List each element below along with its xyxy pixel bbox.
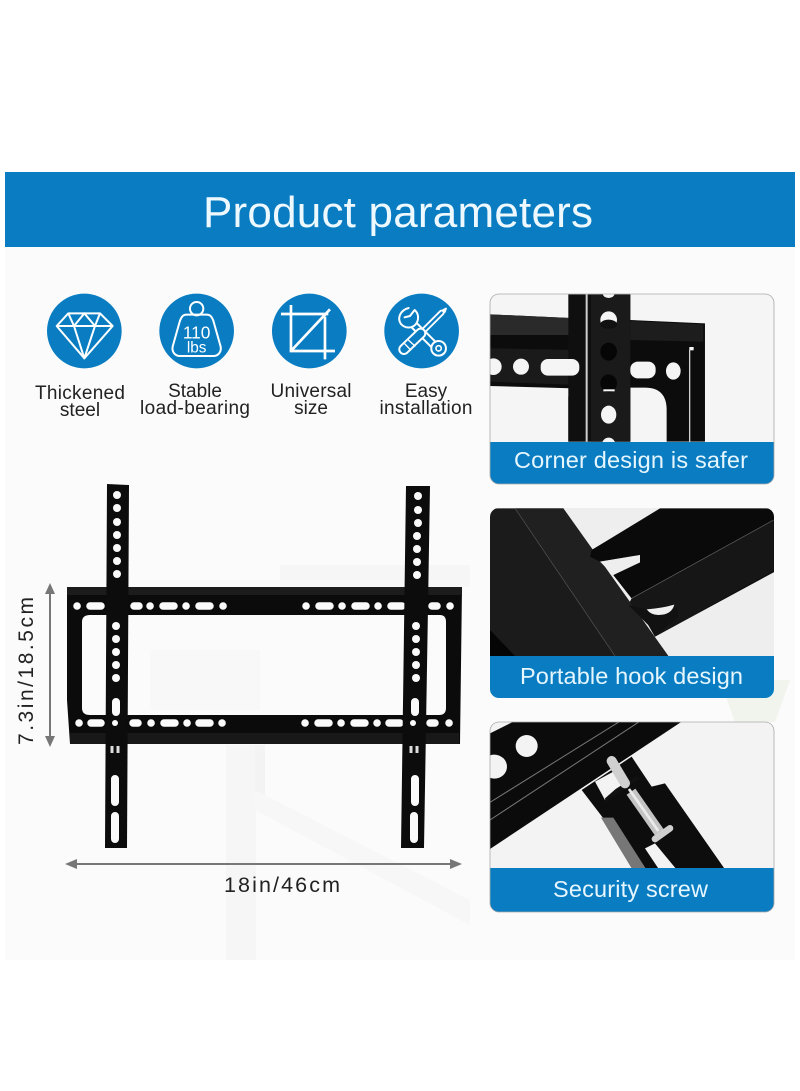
label: easy installation [380, 381, 472, 419]
icon: wrench and screwdriver [384, 294, 459, 368]
wall mount bracket [67, 484, 462, 848]
header banner [5, 172, 795, 247]
panel: hook design [490, 508, 775, 698]
photo: screw close-up [482, 722, 724, 868]
infographic canvas [5, 172, 795, 960]
icon: crop frame [272, 294, 347, 368]
caption: Security screw [553, 876, 709, 902]
caption bar [490, 868, 774, 912]
caption bar [490, 442, 774, 484]
label: universal size: Universal [270, 381, 352, 402]
label: stable load-bearing: Stable [168, 381, 222, 402]
icon: 110 lbs weight: 110 [183, 322, 210, 342]
right vertical arm [401, 486, 430, 848]
left vertical arm [105, 484, 129, 848]
top rail holes [77, 606, 450, 723]
label: thickened steel: Thickened [35, 383, 125, 404]
label: easy installation: installation [380, 398, 472, 419]
photo: corner of frame [490, 294, 705, 442]
icon: 110 lbs weight: lbs [187, 339, 207, 356]
label: stable load-bearing [140, 381, 250, 419]
label: width dimension: 18in/46cm [224, 873, 340, 897]
panel: corner design [485, 289, 774, 484]
photo: hook close-up [490, 508, 775, 656]
label: universal size [270, 381, 352, 419]
vertical dimension arrow [45, 583, 55, 747]
label: universal size: size [294, 398, 328, 419]
caption bar [490, 656, 774, 698]
label: height dimension: 7.3in/18.5cm [15, 597, 38, 745]
horizontal dimension arrow [65, 859, 462, 869]
label: easy installation: Easy [405, 381, 448, 402]
panel: security screw [482, 722, 774, 912]
icon: 110 lbs weight [159, 294, 234, 368]
arm holes [112, 491, 422, 726]
icon: diamond [47, 294, 122, 368]
background room panel [5, 247, 795, 960]
caption: Corner design is safer [514, 447, 748, 473]
label: thickened steel [35, 383, 125, 421]
caption: Portable hook design [520, 663, 743, 689]
label: thickened steel: steel [60, 400, 100, 421]
label: stable load-bearing: load-bearing [140, 398, 250, 419]
title: Product parameters [203, 188, 593, 237]
horizontal frame [67, 587, 462, 744]
